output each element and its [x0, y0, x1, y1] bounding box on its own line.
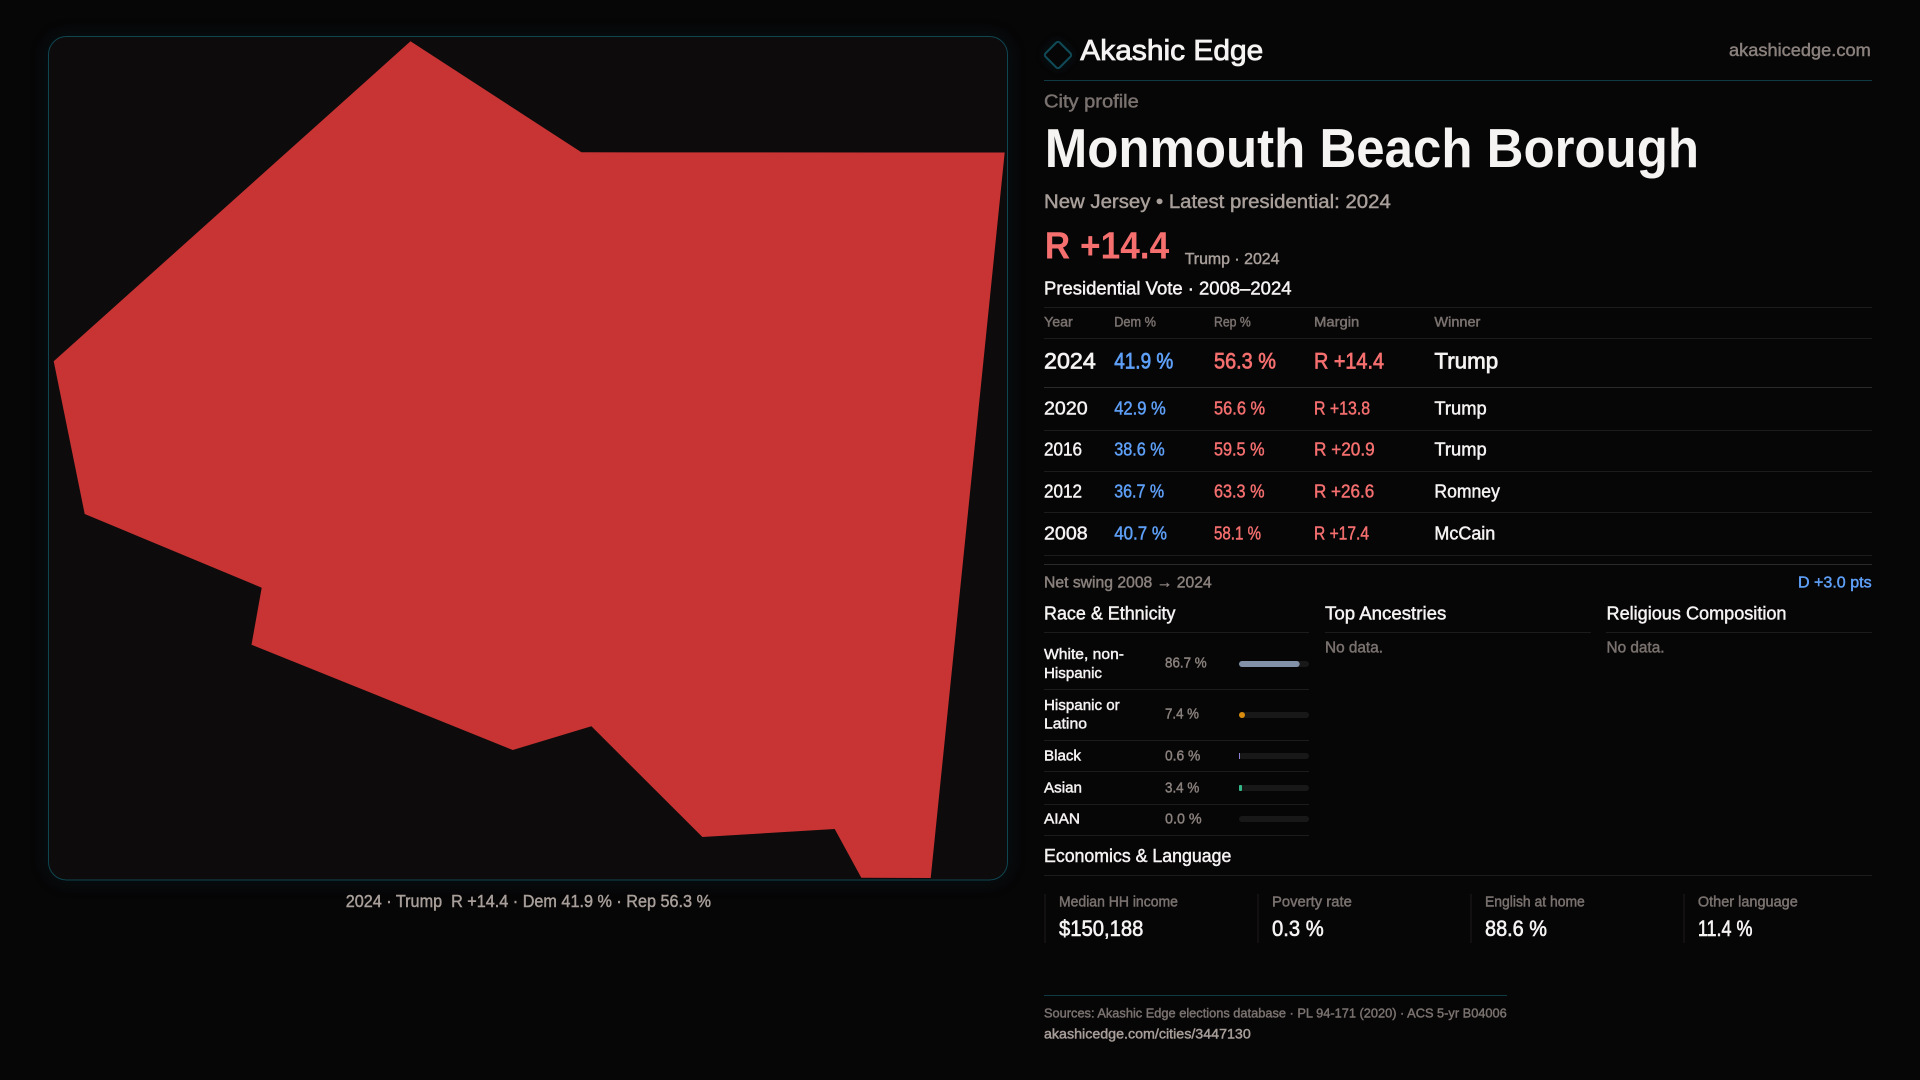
icon: diamond logo: [1044, 41, 1072, 69]
map shape: borough outline: [54, 41, 1005, 878]
row 2024: Trump: [1434, 348, 1498, 373]
eyebrow: city profile: City profile: [1044, 91, 1139, 111]
row 2024: 56.3 %: [1214, 348, 1276, 373]
row 2020: [1044, 398, 1487, 418]
headline margin: R +14.4: [1045, 226, 1169, 268]
net swing: [1044, 574, 1872, 591]
stat: median income: $150,188: [1059, 916, 1143, 941]
stat: english at home: [1470, 894, 1585, 943]
row 2016: 38.6 %: [1114, 440, 1165, 460]
row: white: Hispanic: [1044, 665, 1102, 682]
stat: english at home: English at home: [1485, 895, 1585, 911]
table header: Margin: [1314, 315, 1359, 330]
row 2016: 2016: [1044, 440, 1082, 460]
title: Monmouth Beach Borough: [1045, 118, 1699, 179]
net swing value: D +3.0 pts: [1798, 574, 1872, 591]
table: presidential vote: [1044, 307, 1872, 556]
stat: poverty rate: [1258, 894, 1352, 943]
row 2024: [1044, 348, 1498, 373]
footer: sources: Sources: Akashic Edge elections database · PL 94-171 (2020) · ACS 5-yr B04006: [1044, 1006, 1507, 1021]
row: hispanic: [1044, 697, 1309, 733]
row: white: 86.7 %: [1165, 655, 1207, 672]
row: white: White, non-: [1044, 646, 1124, 663]
footer: sources: [1044, 1006, 1507, 1041]
row 2024: 2024: [1044, 348, 1096, 373]
headline winner: Trump · 2024: [1185, 251, 1280, 268]
row: black: [1044, 748, 1309, 765]
net swing: Net swing 2008 → 2024: [1044, 574, 1212, 591]
row: aian: 0.0 %: [1165, 811, 1202, 828]
heading: presidential vote: Presidential Vote · 2008–2024: [1044, 278, 1292, 298]
row: white: [1044, 646, 1309, 682]
row 2020: Trump: [1434, 398, 1487, 418]
panel: religious composition: [1606, 602, 1872, 657]
table header: [1044, 315, 1481, 330]
row 2016: R +20.9: [1314, 440, 1375, 460]
footer: page url: akashicedge.com/cities/3447130: [1044, 1025, 1251, 1041]
panel: economics and language: [1044, 845, 1872, 943]
row: hispanic: 7.4 %: [1165, 706, 1199, 723]
row: hispanic: Latino: [1044, 716, 1087, 733]
row 2012: [1044, 481, 1500, 501]
row 2016: [1044, 440, 1487, 460]
panel: map: [48, 36, 1008, 880]
table header: Year: [1044, 315, 1073, 330]
row 2012: Romney: [1434, 481, 1500, 501]
row: asian: 3.4 %: [1165, 780, 1199, 797]
stat: poverty rate: 0.3 %: [1272, 916, 1324, 941]
panel: economics and language: Economics & Language: [1044, 845, 1231, 866]
row 2008: [1044, 523, 1495, 543]
panel: religious composition: Religious Composition: [1606, 602, 1786, 624]
row 2016: Trump: [1434, 440, 1487, 460]
stat: english at home: 88.6 %: [1485, 916, 1547, 941]
row 2024: 41.9 %: [1114, 348, 1173, 373]
row 2008: 40.7 %: [1114, 523, 1167, 543]
row 2020: R +13.8: [1314, 398, 1370, 418]
row 2012: 63.3 %: [1214, 481, 1264, 501]
panel: race and ethnicity: [1044, 602, 1309, 836]
row 2020: 56.6 %: [1214, 398, 1265, 418]
table header: Rep %: [1214, 315, 1251, 330]
site url: akashicedge.com: [1729, 40, 1871, 60]
row: aian: [1044, 811, 1309, 828]
stat: other language: 11.4 %: [1698, 916, 1752, 941]
row: aian: AIAN: [1044, 811, 1080, 828]
row: hispanic: Hispanic or: [1044, 697, 1120, 714]
no data note: No data.: [1325, 640, 1383, 657]
panel: top ancestries: [1325, 602, 1591, 657]
header: brand: [1044, 35, 1871, 69]
row: black: Black: [1044, 748, 1081, 765]
stat: poverty rate: Poverty rate: [1272, 895, 1352, 911]
row: asian: Asian: [1044, 780, 1082, 797]
headline margin: [1045, 226, 1280, 268]
table header: Dem %: [1114, 315, 1156, 330]
brand name: Akashic Edge: [1080, 35, 1263, 67]
row: asian: [1044, 780, 1309, 797]
row 2020: 42.9 %: [1114, 398, 1166, 418]
row 2016: 59.5 %: [1214, 440, 1264, 460]
row 2012: 36.7 %: [1114, 481, 1164, 501]
subtitle: New Jersey • Latest presidential: 2024: [1044, 191, 1391, 213]
row 2020: 2020: [1044, 398, 1088, 418]
row 2008: 2008: [1044, 523, 1088, 543]
row 2012: 2012: [1044, 481, 1082, 501]
row 2012: R +26.6: [1314, 481, 1374, 501]
panel: race and ethnicity: Race & Ethnicity: [1044, 602, 1176, 624]
row 2008: 58.1 %: [1214, 523, 1261, 543]
row 2008: McCain: [1434, 523, 1495, 543]
stat: median income: [1044, 894, 1178, 943]
stat: other language: [1684, 894, 1798, 943]
no data note: No data.: [1606, 640, 1664, 657]
row: black: 0.6 %: [1165, 748, 1200, 765]
stat: median income: Median HH income: [1059, 895, 1178, 911]
stat: other language: Other language: [1698, 895, 1798, 911]
map caption: 2024 · Trump R +14.4 · Dem 41.9 % · Rep 56.3 %: [346, 891, 711, 911]
panel: top ancestries: Top Ancestries: [1325, 602, 1446, 624]
table header: Winner: [1434, 315, 1481, 330]
row 2024: R +14.4: [1314, 348, 1384, 373]
row 2008: R +17.4: [1314, 523, 1369, 543]
